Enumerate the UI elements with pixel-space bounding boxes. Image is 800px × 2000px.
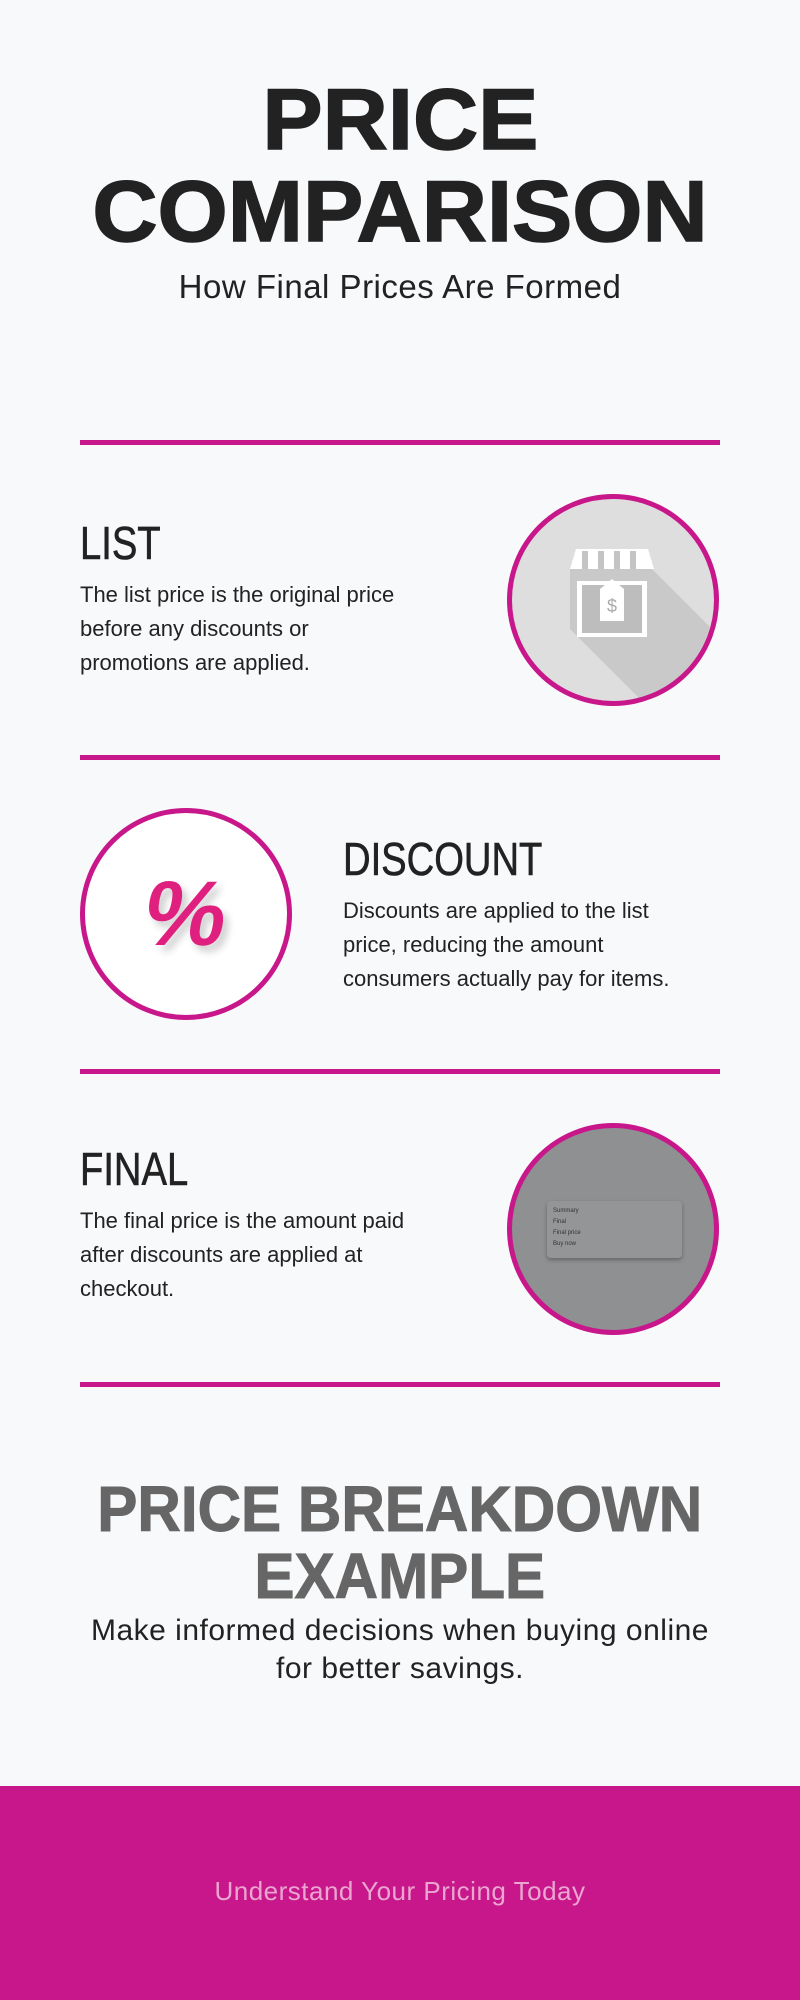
text: breakdown subtitle: Make informed decisions when buying online <box>91 1614 709 1647</box>
icon: store circle: $ <box>607 596 617 616</box>
icon: checkout card circle: Final price <box>553 1230 581 1236</box>
icon: percent circle: % <box>136 862 236 964</box>
icon: checkout card circle: Final <box>553 1219 566 1225</box>
section: final <box>80 1123 719 1335</box>
text: breakdown subtitle <box>91 1614 709 1685</box>
heading: final: FINAL <box>80 1143 188 1195</box>
text: final: The final price is the amount paid after discounts are applied at checkout. <box>80 1208 404 1301</box>
heading: price breakdown: EXAMPLE <box>255 1540 545 1612</box>
heading: discount: DISCOUNT <box>343 833 542 885</box>
section: discount <box>80 808 669 1020</box>
text: discount: Discounts are applied to the list price, reducing the amount consumers actually pay for items. <box>343 898 669 991</box>
footer text: Understand Your Pricing Today <box>214 1876 586 1906</box>
subtitle: How Final Prices Are Formed <box>179 268 621 305</box>
heading: price breakdown <box>98 1473 702 1612</box>
icon: checkout card circle <box>507 1123 719 1335</box>
icon: checkout card circle: Summary <box>553 1208 579 1214</box>
footer <box>0 1786 800 2000</box>
text: breakdown subtitle: for better savings. <box>276 1652 524 1685</box>
icon: checkout card circle: Buy now <box>553 1241 576 1247</box>
text: list: The list price is the original price before any discounts or promotions are applied. <box>80 582 394 675</box>
icon: store circle <box>507 494 719 706</box>
title: COMPARISON <box>92 164 708 260</box>
title: PRICE <box>262 72 538 168</box>
icon: percent circle <box>80 808 292 1020</box>
section: list <box>80 494 719 706</box>
title <box>92 72 708 260</box>
heading: list: LIST <box>80 517 161 569</box>
heading: price breakdown: PRICE BREAKDOWN <box>98 1473 702 1545</box>
